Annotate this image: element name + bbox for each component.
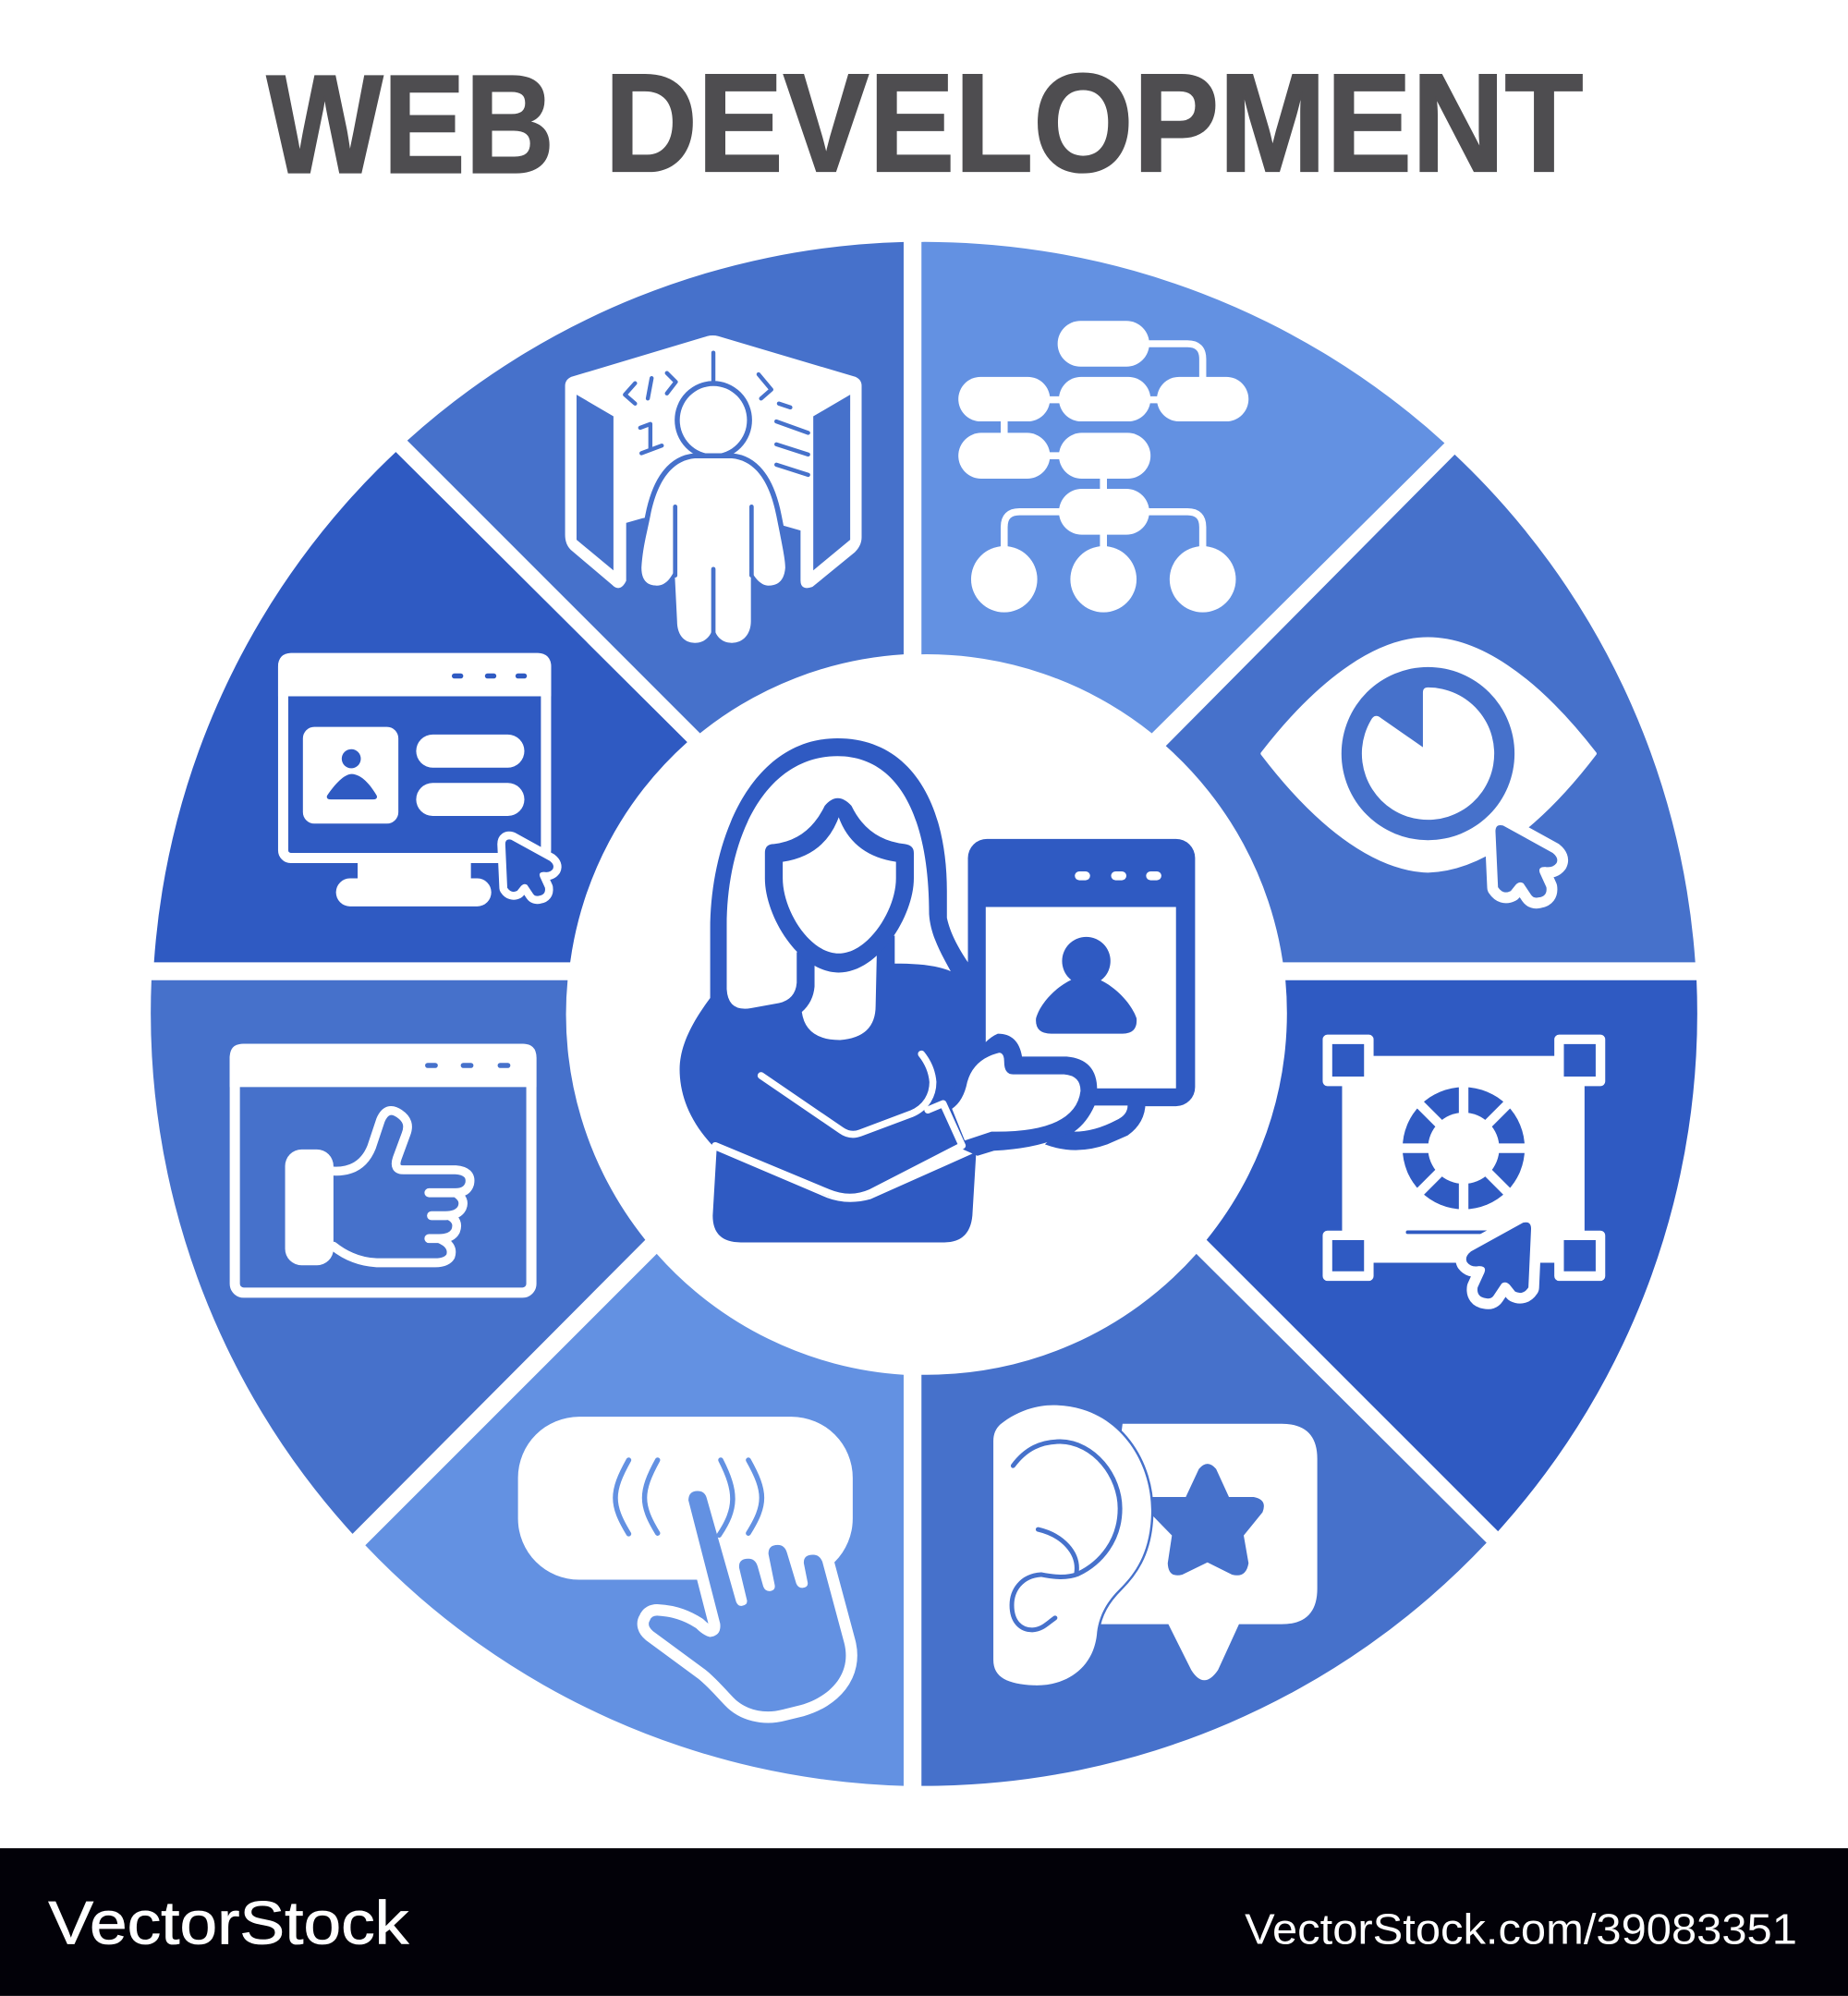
segment: left lower bbox=[151, 980, 645, 1534]
segment: bottom right bbox=[921, 1254, 1487, 1786]
tablet profile bbox=[1036, 937, 1137, 1034]
segment: left upper bbox=[154, 452, 687, 962]
icon: eye with pie chart bbox=[1262, 639, 1595, 898]
tablet bbox=[968, 839, 1195, 1106]
icon: thumbs up window bbox=[230, 1044, 537, 1293]
neck bbox=[802, 948, 877, 1040]
segment: bottom left bbox=[365, 1254, 904, 1786]
icon: woman holding tablet bbox=[680, 738, 1195, 1242]
segment: top left bbox=[407, 242, 904, 733]
icon: finger tapping button bbox=[518, 1417, 853, 1711]
title: DEVELOPMENT bbox=[604, 45, 1583, 201]
fingers under tablet bbox=[1045, 1102, 1146, 1150]
icon: website design frame bbox=[1328, 1040, 1600, 1298]
icon: developer between code panels bbox=[566, 336, 860, 643]
title: WEB bbox=[267, 47, 554, 203]
segment: right upper bbox=[1166, 455, 1696, 962]
hand outline bbox=[948, 1034, 1097, 1156]
icon: flowchart bbox=[958, 321, 1248, 613]
footer bar bbox=[0, 1848, 1848, 1996]
segment: top right bbox=[921, 242, 1444, 733]
image id text: VectorStock.com/39083351 bbox=[1245, 1905, 1797, 1953]
face bbox=[765, 798, 914, 972]
segmented ring bbox=[151, 242, 1697, 1786]
lower shirt bbox=[712, 1150, 976, 1242]
logo text: VectorStock bbox=[48, 1889, 409, 1957]
title bbox=[267, 45, 1583, 203]
icon: ear and rating bubble bbox=[993, 1406, 1318, 1686]
hair inner bbox=[727, 756, 951, 1009]
icon: monitor with profile bbox=[278, 653, 553, 907]
segment: right lower bbox=[1207, 980, 1697, 1531]
sleeve and arm lines bbox=[715, 1054, 962, 1198]
torso and hair silhouette bbox=[680, 738, 986, 1200]
